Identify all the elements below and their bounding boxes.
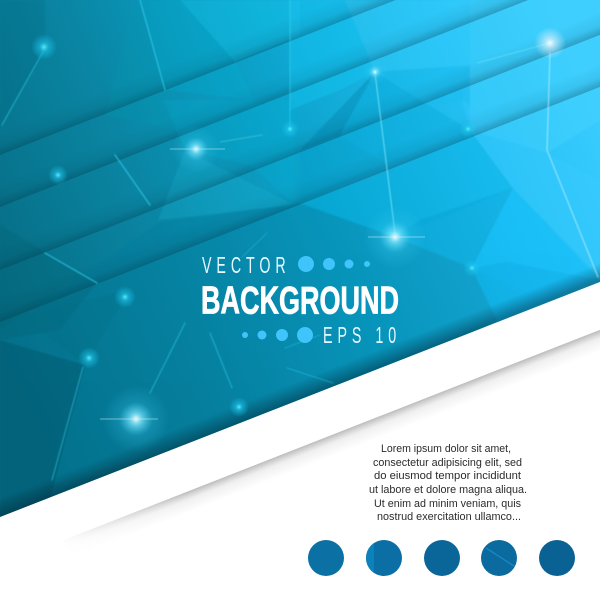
shadow lines between bands <box>0 0 600 322</box>
white strip shadow <box>0 310 600 600</box>
heading: BACKGROUND: BACKGROUND <box>201 280 399 322</box>
decoration: dots after VECTOR <box>298 256 370 272</box>
icon row: five blue circles <box>308 540 575 576</box>
text block: lorem ipsum: Lorem ipsum dolor sit amet, <box>381 443 511 455</box>
text block: lorem ipsum: consectetur adipisicing elit, sed <box>373 457 522 469</box>
text block: lorem ipsum: ut labore et dolore magna aliqua. <box>369 484 527 496</box>
text block: lorem ipsum <box>369 443 527 523</box>
decoration: dots before EPS 10 <box>242 327 313 343</box>
light streaks <box>2 0 598 480</box>
shadow along lower edge <box>0 264 600 517</box>
glowing stars <box>31 27 566 453</box>
text block: lorem ipsum: Ut enim ad minim veniam, quis <box>374 498 521 510</box>
heading: VECTOR: VECTOR <box>202 254 286 279</box>
heading: EPS 10: EPS 10 <box>323 324 396 349</box>
text block: lorem ipsum: do eiusmod tempor incididunt <box>374 470 521 482</box>
text block: lorem ipsum: nostrud exercitation ullamco... <box>377 511 521 523</box>
